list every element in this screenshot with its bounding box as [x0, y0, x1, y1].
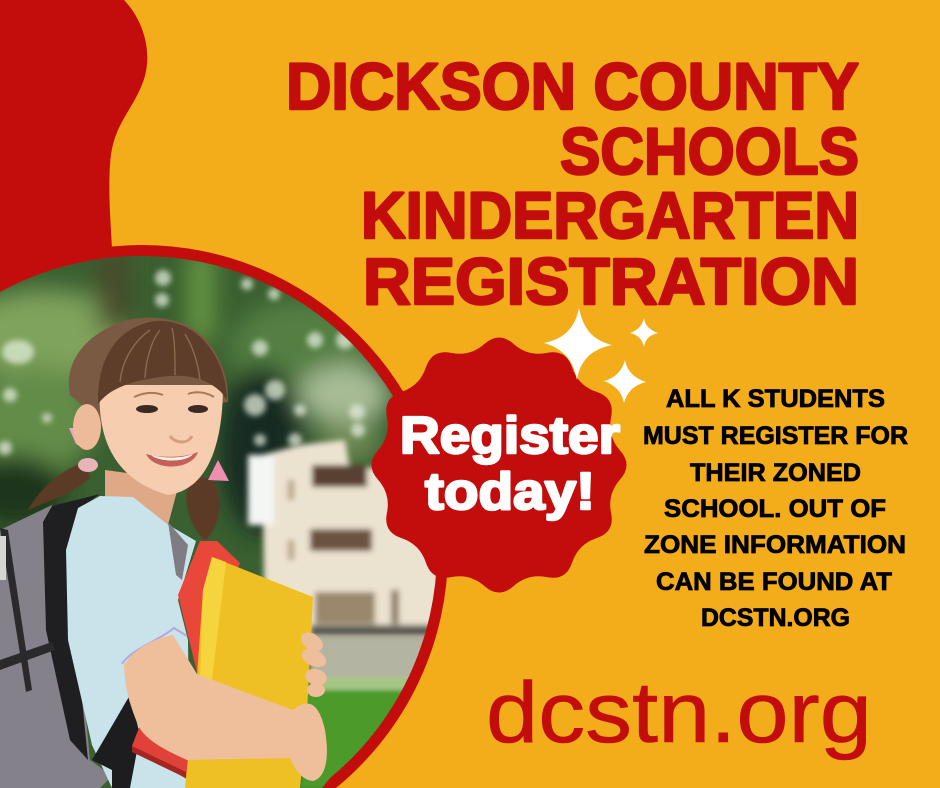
- badge text line 1: Register: [400, 407, 620, 465]
- bangs strands: [120, 328, 200, 382]
- hair pigtails: [28, 462, 220, 540]
- title line 4: REGISTRATION: [363, 244, 859, 318]
- info line 7: DCSTN.ORG: [701, 604, 850, 632]
- info line 5: ZONE INFORMATION: [644, 531, 906, 559]
- wavy badge shape: [371, 337, 627, 593]
- title: [286, 49, 859, 318]
- website url: dcstn.org: [486, 665, 872, 761]
- neck: [105, 470, 180, 525]
- photo: girl with backpack and books: [0, 250, 445, 788]
- info line 2: MUST REGISTER FOR: [643, 422, 908, 450]
- nose: [170, 436, 192, 442]
- blurred foliage background: [0, 250, 445, 788]
- hair ties: [69, 428, 229, 481]
- light blue shirt: [66, 496, 196, 788]
- hair back: [69, 318, 228, 420]
- red ring around photo: [0, 245, 448, 788]
- fingers: [301, 632, 327, 697]
- title line 2: SCHOOLS: [560, 114, 859, 188]
- smile: [146, 452, 198, 467]
- bangs: [98, 321, 227, 404]
- info line 3: THEIR ZONED: [690, 459, 861, 487]
- backpack: [0, 505, 112, 788]
- title line 3: KINDERGARTEN: [361, 178, 859, 252]
- red book: [132, 541, 240, 780]
- title line 1: DICKSON COUNTY: [286, 49, 859, 123]
- info line 4: SCHOOL. OUT OF: [664, 495, 886, 523]
- sleeve trim: [122, 628, 187, 664]
- eyes: [136, 405, 208, 413]
- ear: [73, 404, 101, 450]
- red blob top left: [0, 0, 147, 292]
- badge: register today: [371, 337, 627, 593]
- blurred building: [248, 440, 445, 640]
- face: [100, 385, 223, 495]
- lower backpack strap: [92, 695, 140, 788]
- icon: sparkles: [544, 308, 658, 403]
- badge text line 2: today!: [425, 463, 595, 521]
- lawn: [300, 635, 424, 788]
- eyebrows: [134, 392, 214, 397]
- yellow book: [185, 557, 313, 788]
- arm and hand: [124, 635, 327, 781]
- large sparkle: [544, 308, 612, 380]
- info line 1: ALL K STUDENTS: [666, 385, 885, 413]
- information text block: [643, 385, 908, 632]
- gray shirt shoulder patch: [168, 522, 188, 580]
- medium sparkle: [604, 360, 646, 403]
- small sparkle: [630, 318, 658, 347]
- info line 6: CAN BE FOUND AT: [656, 568, 892, 596]
- backpack straps and zipper: [0, 494, 100, 760]
